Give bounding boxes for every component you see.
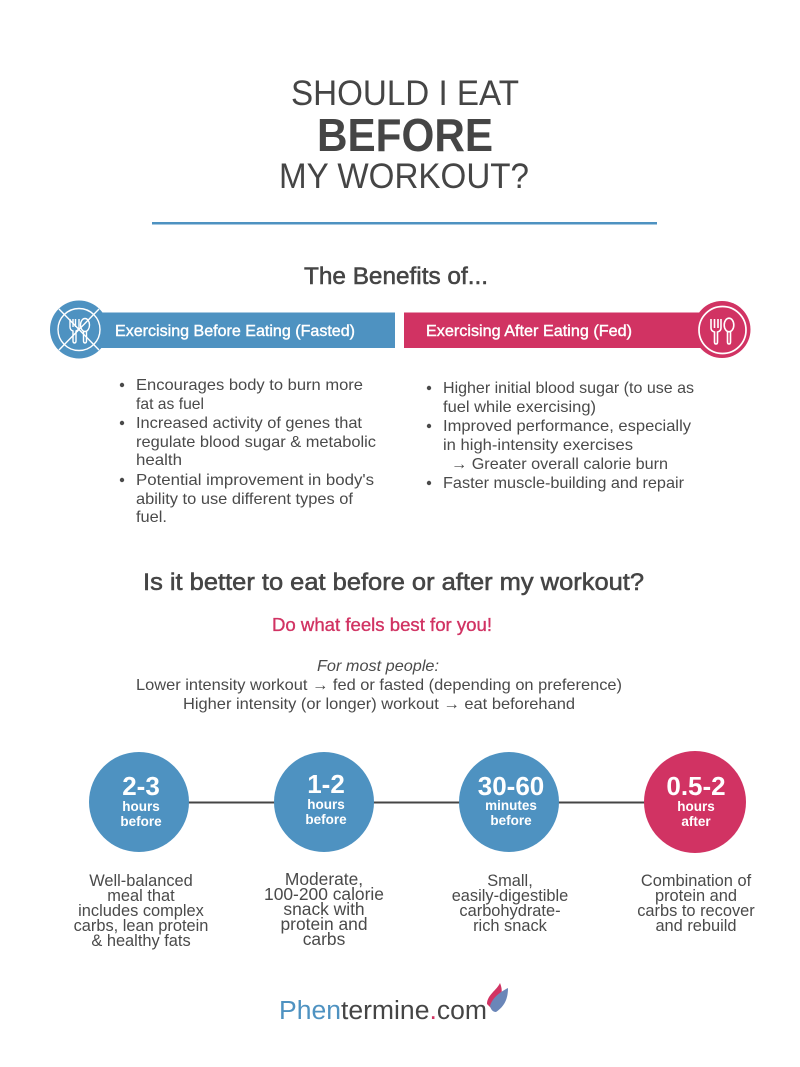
timeline step: 2-3 hours before: before [120, 814, 162, 829]
timeline step: 1-2 hours before: 1-2 [307, 769, 345, 799]
caption: 2-3 hours: meal that [107, 887, 175, 905]
caption: 2-3 hours: includes complex [78, 902, 205, 920]
timeline step: 30-60 minutes before [459, 752, 559, 852]
timeline step: 0.5-2 hours after [644, 751, 746, 853]
caption: 0.5-2 hours after: Combination of [641, 872, 752, 890]
caption: 2-3 hours: Well-balanced [89, 872, 193, 890]
logo: Phentermine.com [279, 997, 487, 1025]
caption: 1-2 hours: 100-200 calorie [264, 884, 384, 904]
text block: fed benefits: in high-intensity exercises [443, 437, 633, 454]
title: MY WORKOUT? [279, 157, 529, 196]
caption: 0.5-2 hours after: carbs to recover [637, 902, 755, 920]
caption: 30-60 minutes: Small, [487, 872, 533, 890]
caption: 2-3 hours: carbs, lean protein [74, 917, 208, 935]
icon: fork and spoon on plate [699, 306, 746, 354]
title: BEFORE [317, 109, 493, 161]
title: SHOULD I EAT [291, 74, 519, 113]
timeline step: 2-3 hours before [89, 752, 189, 852]
caption: 30-60 minutes: easily-digestible [452, 887, 568, 905]
panel: fasted banner [50, 300, 395, 358]
text block: fasted benefits: fat as fuel [136, 396, 204, 413]
text block: fed benefits: fuel while exercising) [443, 399, 596, 416]
timeline step: 1-2 hours before [274, 752, 374, 852]
caption: 1-2 hours [264, 869, 384, 949]
caption: 1-2 hours: carbs [303, 929, 346, 949]
text block: for most people: Lower intensity workout → fed or fasted (depending on preference) [136, 677, 622, 694]
timeline step: 0.5-2 hours after: hours [677, 799, 715, 814]
icon: butterfly [487, 983, 508, 1012]
text block: fasted benefits: Encourages body to burn more [136, 377, 363, 394]
logo [279, 983, 508, 1025]
timeline step: 2-3 hours before: hours [122, 799, 160, 814]
panel: fed banner [404, 301, 750, 358]
caption: 2-3 hours: & healthy fats [91, 932, 191, 950]
timeline step: 1-2 hours before: before [305, 812, 347, 827]
caption: 30-60 minutes [452, 872, 568, 935]
callout: do what feels best: Do what feels best for you! [272, 615, 492, 635]
panel: fed banner: Exercising After Eating (Fed) [426, 323, 632, 340]
text block: fed benefits [427, 380, 694, 492]
timeline step: 1-2 hours before: hours [307, 797, 345, 812]
text block: fasted benefits: health [136, 452, 182, 469]
caption: 30-60 minutes: rich snack [473, 917, 548, 935]
caption: 30-60 minutes: carbohydrate- [459, 902, 561, 920]
text block: fasted benefits: Increased activity of genes that [136, 415, 363, 432]
caption: 0.5-2 hours after [637, 872, 755, 935]
icon: crossed-out fork and spoon [58, 308, 100, 350]
text block: for most people: For most people: [317, 658, 439, 675]
timeline step: 30-60 minutes before: before [490, 813, 532, 828]
text block: fasted benefits: fuel. [136, 509, 167, 526]
text block: fasted benefits: regulate blood sugar & metabolic [136, 434, 376, 451]
text block: fed benefits: Improved performance, especially [443, 418, 691, 435]
timeline step: 30-60 minutes before: 30-60 [478, 771, 544, 801]
panel: fasted banner: Exercising Before Eating (Fasted) [115, 323, 355, 340]
text block: fed benefits: → Greater overall calorie burn [451, 456, 668, 473]
title [279, 74, 529, 196]
text block: fasted benefits [120, 377, 376, 526]
timeline step: 0.5-2 hours after: after [681, 814, 711, 829]
text block: fed benefits: Higher initial blood sugar (to use as [443, 380, 694, 397]
caption: 1-2 hours: Moderate, [285, 869, 363, 889]
text block: for most people: Higher intensity (or longer) workout → eat beforehand [183, 696, 575, 713]
caption: 1-2 hours: snack with [283, 899, 365, 919]
caption: 0.5-2 hours after: and rebuild [655, 917, 737, 935]
timeline step: 2-3 hours before: 2-3 [122, 771, 160, 801]
heading: the benefits of: The Benefits of... [304, 263, 488, 290]
heading: better before or after: Is it better to eat before or after my workout? [143, 569, 644, 596]
text block: for most people [136, 658, 622, 713]
timeline step: 0.5-2 hours after: 0.5-2 [666, 771, 726, 801]
caption: 1-2 hours: protein and [280, 914, 368, 934]
caption: 0.5-2 hours after: protein and [655, 887, 737, 905]
text block: fasted benefits: Potential improvement in body's [136, 472, 374, 489]
timeline [89, 751, 746, 853]
caption: 2-3 hours [74, 872, 208, 950]
text block: fasted benefits: ability to use different types of [136, 491, 354, 508]
timeline step: 30-60 minutes before: minutes [485, 798, 537, 813]
text block: fed benefits: Faster muscle-building and repair [443, 475, 685, 492]
